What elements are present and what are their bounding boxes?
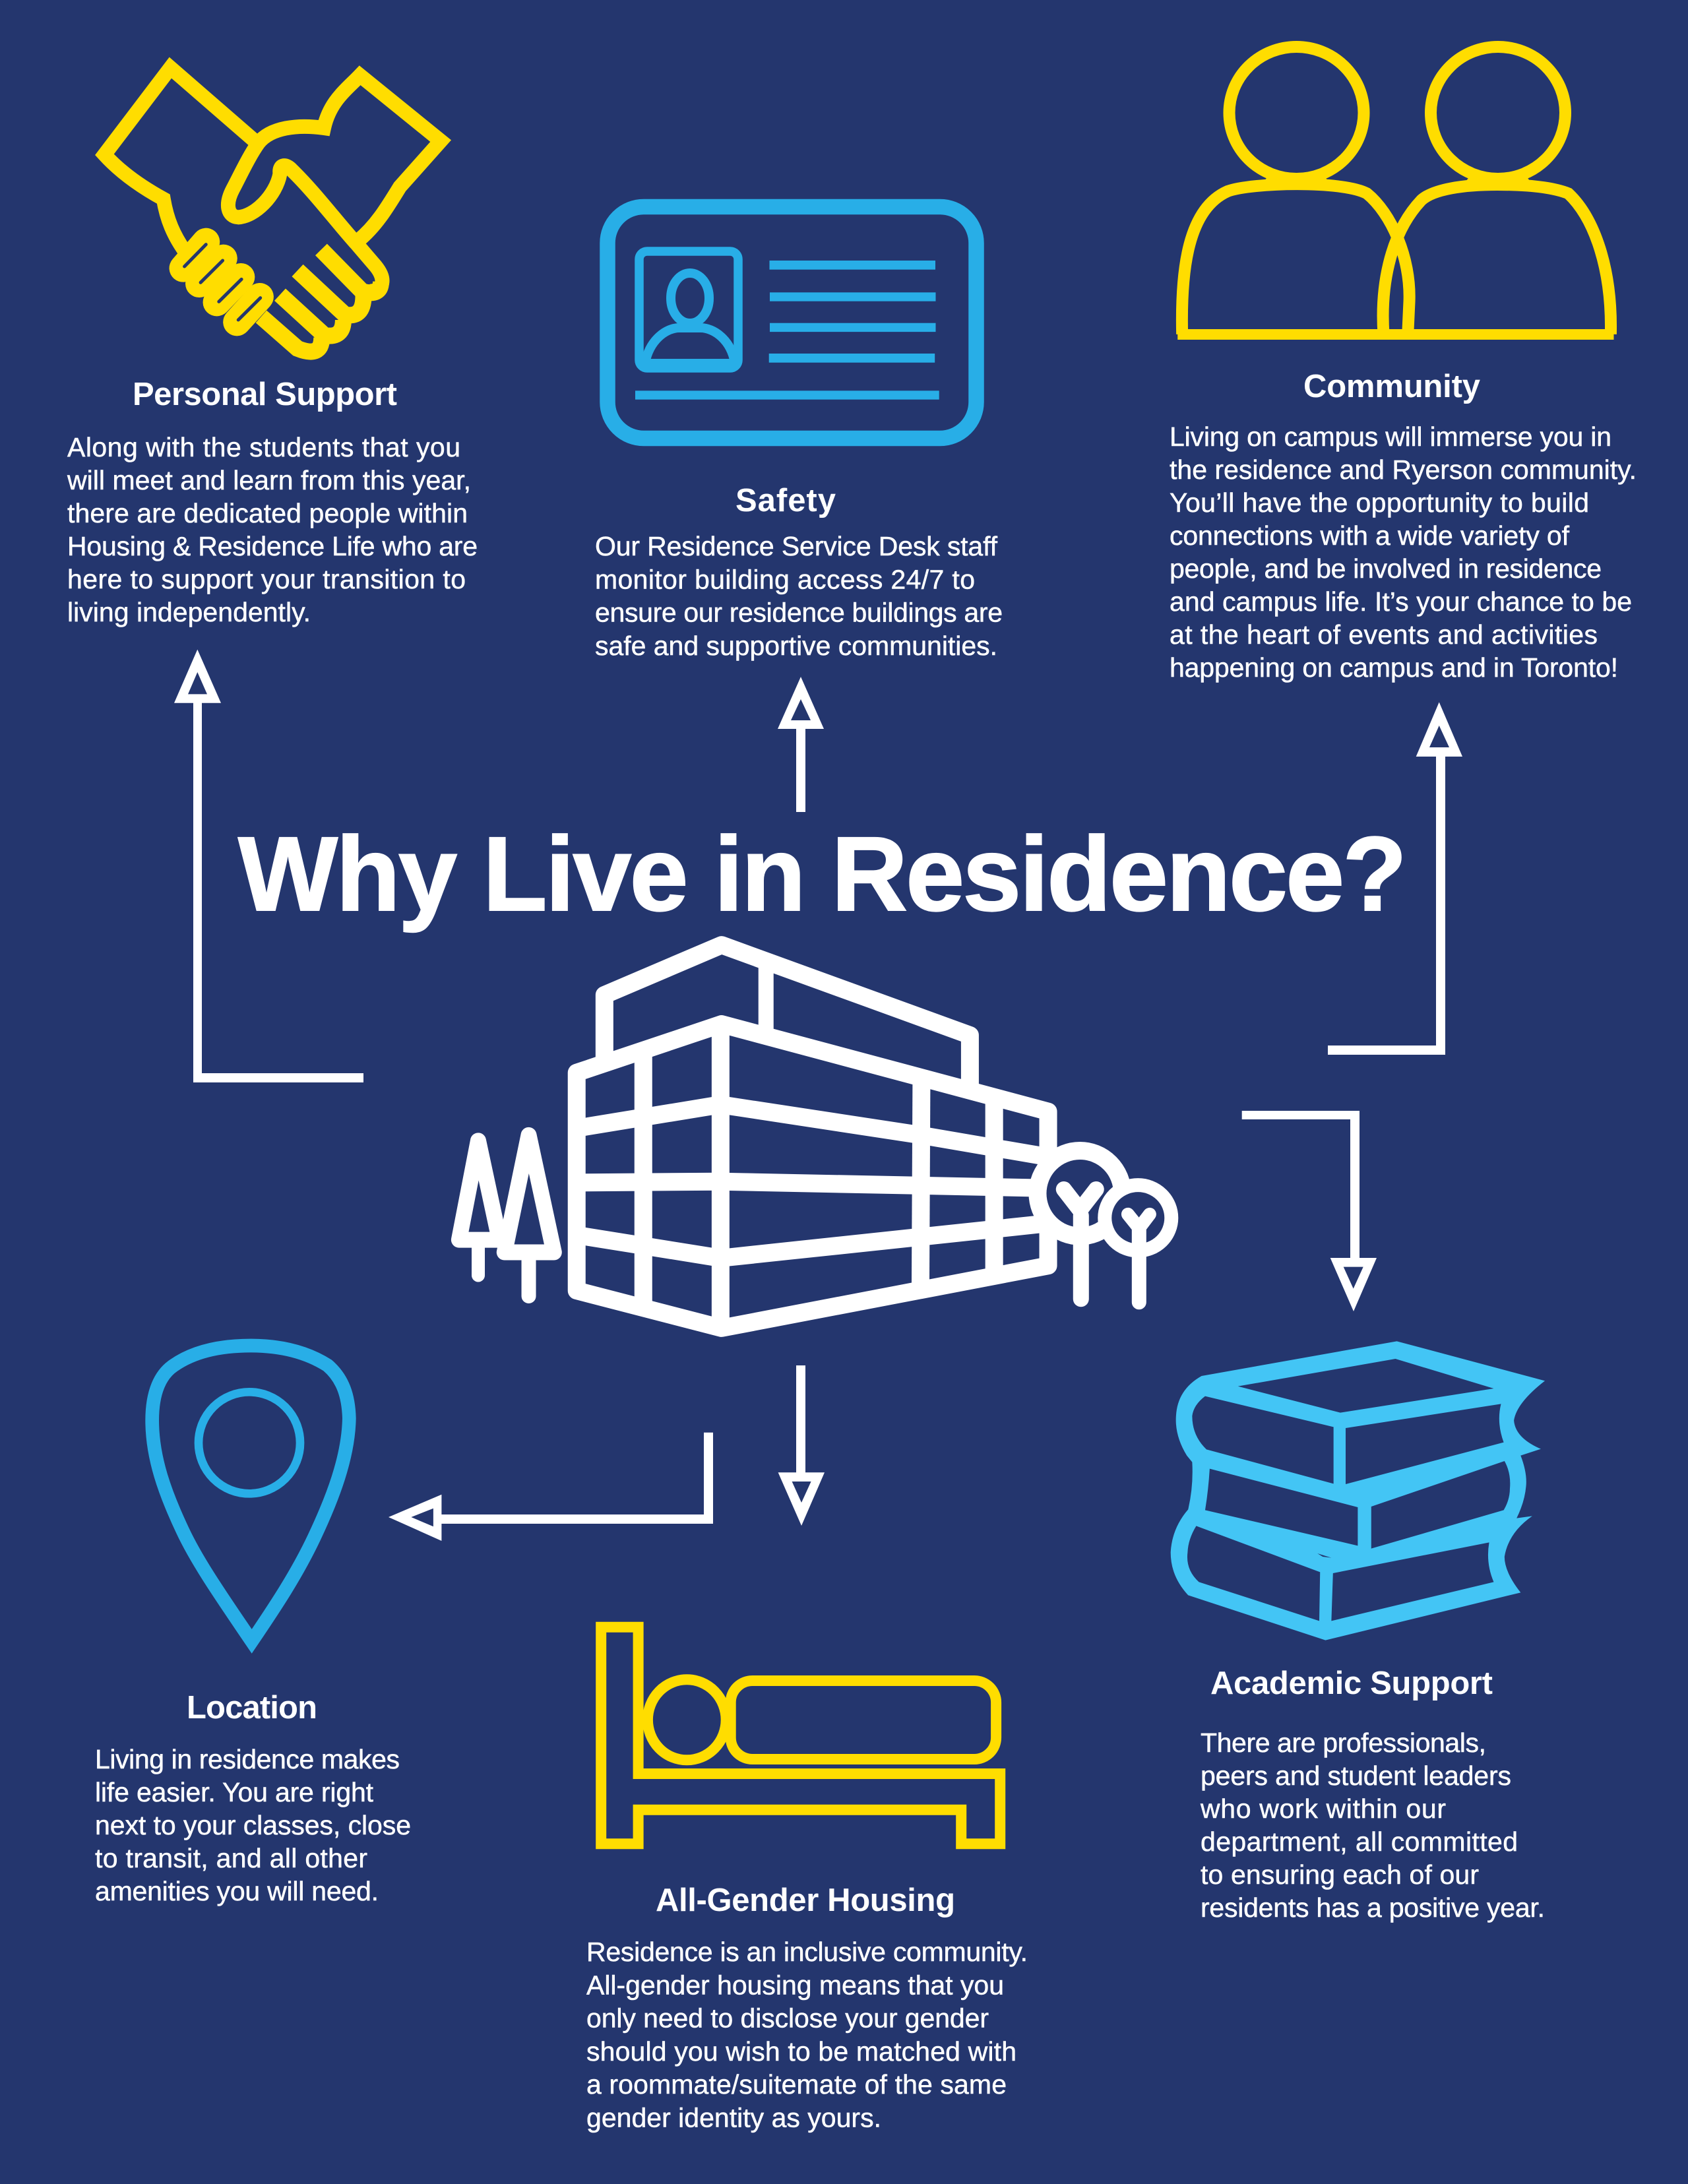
text block: academic support: There are professionals, bbox=[1201, 1728, 1486, 1758]
text block: location: life easier. You are right bbox=[95, 1777, 374, 1807]
panel: community bbox=[1170, 47, 1637, 683]
icon: id card bbox=[608, 207, 976, 438]
icon: stack of books bbox=[1171, 1341, 1545, 1640]
building upper block bbox=[604, 945, 970, 1088]
text block: all-gender housing: All-gender housing means that you bbox=[586, 1970, 1004, 2000]
text block: academic support: peers and student leaders bbox=[1201, 1761, 1511, 1791]
text block: academic support bbox=[1200, 1728, 1545, 1923]
text block: personal support: living independently. bbox=[67, 597, 311, 627]
text block: all-gender housing bbox=[586, 1937, 1028, 2133]
round tree small bbox=[1105, 1185, 1172, 1302]
icon: bed bbox=[601, 1627, 1000, 1844]
text block: location: to transit, and all other bbox=[95, 1843, 367, 1873]
icon: residence building with trees bbox=[459, 945, 1172, 1328]
arrow: to location bbox=[389, 1433, 713, 1541]
evergreen trees bbox=[459, 1135, 554, 1296]
panel: academic support bbox=[1171, 1341, 1545, 1923]
text block: community: people, and be involved in residence bbox=[1170, 553, 1602, 584]
text block: safety: ensure our residence buildings are bbox=[595, 598, 1003, 628]
heading: all-gender housing: All-Gender Housing bbox=[656, 1883, 955, 1918]
text block: personal support: will meet and learn from this year, bbox=[67, 465, 471, 495]
text block: academic support: to ensuring each of our bbox=[1201, 1859, 1479, 1890]
text block: safety: Our Residence Service Desk staff bbox=[595, 531, 998, 561]
text block: community: the residence and Ryerson community. bbox=[1170, 454, 1637, 485]
text block: academic support: who work within our bbox=[1200, 1794, 1446, 1824]
panel: all-gender housing bbox=[586, 1627, 1028, 2133]
text block: all-gender housing: Residence is an inclusive community. bbox=[586, 1937, 1028, 1967]
icon: two people bbox=[1177, 47, 1613, 334]
heading: location: Location bbox=[187, 1690, 317, 1726]
panel: personal support bbox=[67, 68, 478, 627]
arrow: to academic support bbox=[1242, 1111, 1377, 1311]
heading: personal support: Personal Support bbox=[133, 377, 397, 412]
text block: all-gender housing: a roommate/suitemate of the same bbox=[586, 2069, 1007, 2100]
text block: location: amenities you will need. bbox=[95, 1876, 379, 1906]
icon: handshake bbox=[104, 68, 441, 352]
text block: academic support: department, all committed bbox=[1201, 1826, 1518, 1857]
text block: community: connections with a wide variety of bbox=[1170, 520, 1570, 551]
text block: all-gender housing: gender identity as yours. bbox=[586, 2103, 881, 2133]
text block: safety bbox=[595, 531, 1003, 661]
text block: community: Living on campus will immerse you in bbox=[1170, 421, 1611, 452]
icon: map pin bbox=[152, 1346, 349, 1641]
building main block bbox=[577, 1024, 1048, 1328]
text block: all-gender housing: should you wish to be matched with bbox=[586, 2036, 1016, 2067]
panel: safety bbox=[595, 207, 1003, 661]
arrow: to personal support bbox=[174, 650, 363, 1082]
arrow: to safety bbox=[778, 677, 824, 812]
round tree large bbox=[1038, 1150, 1123, 1299]
text block: community bbox=[1170, 421, 1637, 683]
title: Why Live in Residence? bbox=[238, 815, 1407, 933]
arrow: to all-gender housing bbox=[778, 1365, 825, 1526]
heading: community: Community bbox=[1303, 369, 1480, 404]
panel: location bbox=[95, 1346, 411, 1906]
arrow: to community bbox=[1328, 702, 1462, 1055]
text block: personal support bbox=[67, 432, 478, 627]
text block: personal support: Housing & Residence Life who are bbox=[67, 531, 478, 561]
text block: personal support: here to support your transition to bbox=[67, 564, 466, 594]
text block: safety: safe and supportive communities. bbox=[595, 631, 997, 661]
text block: location bbox=[95, 1744, 411, 1906]
text block: personal support: Along with the students that you bbox=[67, 432, 460, 462]
heading: safety: Safety bbox=[735, 483, 836, 518]
text block: all-gender housing: only need to disclose your gender bbox=[586, 2003, 989, 2034]
text block: academic support: residents has a positive year. bbox=[1201, 1892, 1545, 1923]
heading: academic support: Academic Support bbox=[1210, 1666, 1493, 1701]
text block: community: happening on campus and in Toronto! bbox=[1170, 652, 1618, 683]
text block: community: at the heart of events and activities bbox=[1170, 619, 1598, 650]
text block: location: Living in residence makes bbox=[95, 1744, 400, 1774]
text block: community: You’ll have the opportunity to build bbox=[1170, 487, 1589, 518]
text block: personal support: there are dedicated people within bbox=[67, 498, 468, 528]
text block: community: and campus life. It’s your chance to be bbox=[1170, 586, 1632, 617]
text block: safety: monitor building access 24/7 to bbox=[595, 564, 975, 594]
text block: location: next to your classes, close bbox=[95, 1810, 411, 1840]
